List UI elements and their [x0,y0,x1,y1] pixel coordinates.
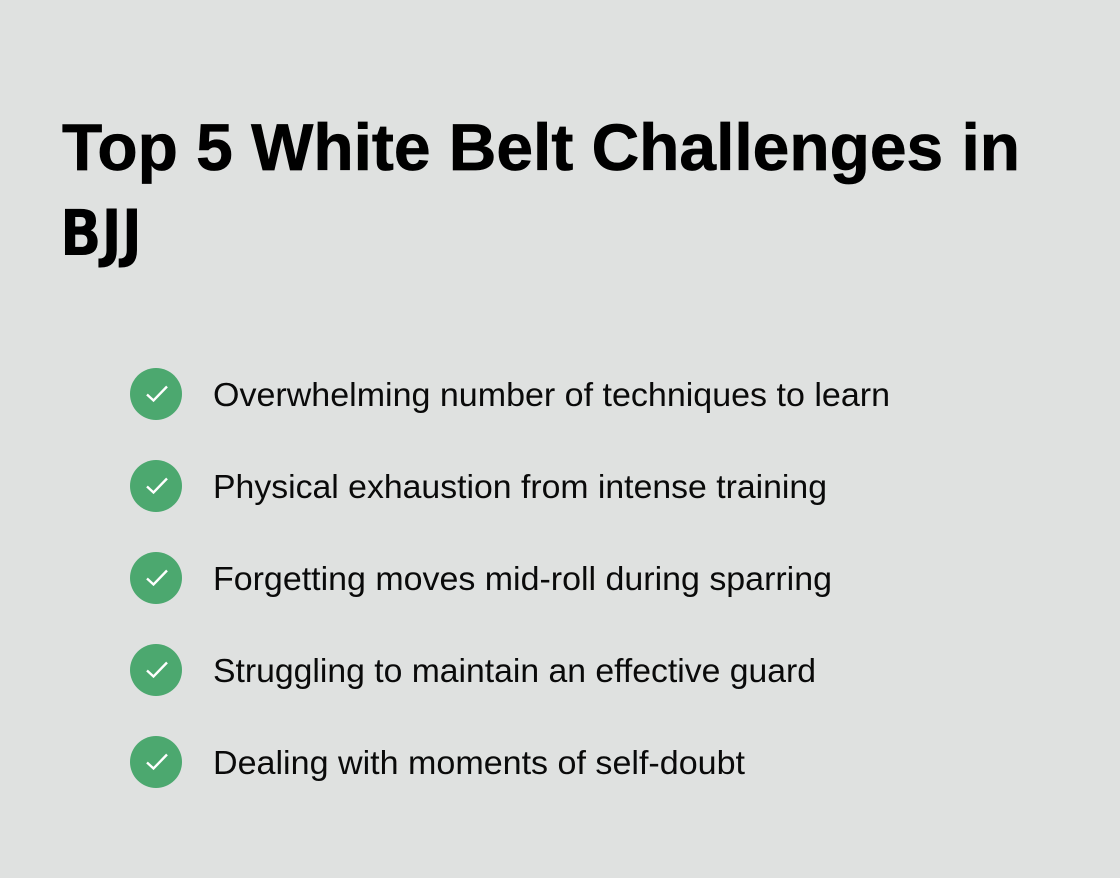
item: forgetting moves [130,552,832,604]
checklist [130,368,890,788]
item: guard: Struggling to maintain an effective guard [213,652,816,689]
item: exhaustion: Physical exhaustion from intense training [213,468,827,505]
item: self-doubt [130,736,745,788]
item: techniques [130,368,890,420]
item: forgetting moves: Forgetting moves mid-roll during sparring [213,560,832,597]
title [60,110,1020,270]
item: exhaustion [130,460,827,512]
item: self-doubt: Dealing with moments of self-doubt [213,744,745,781]
title: Top 5 White Belt Challenges in [62,110,1020,184]
item: techniques: Overwhelming number of techniques to learn [213,376,890,413]
item: guard [130,644,816,696]
title: BJJ [60,197,142,270]
